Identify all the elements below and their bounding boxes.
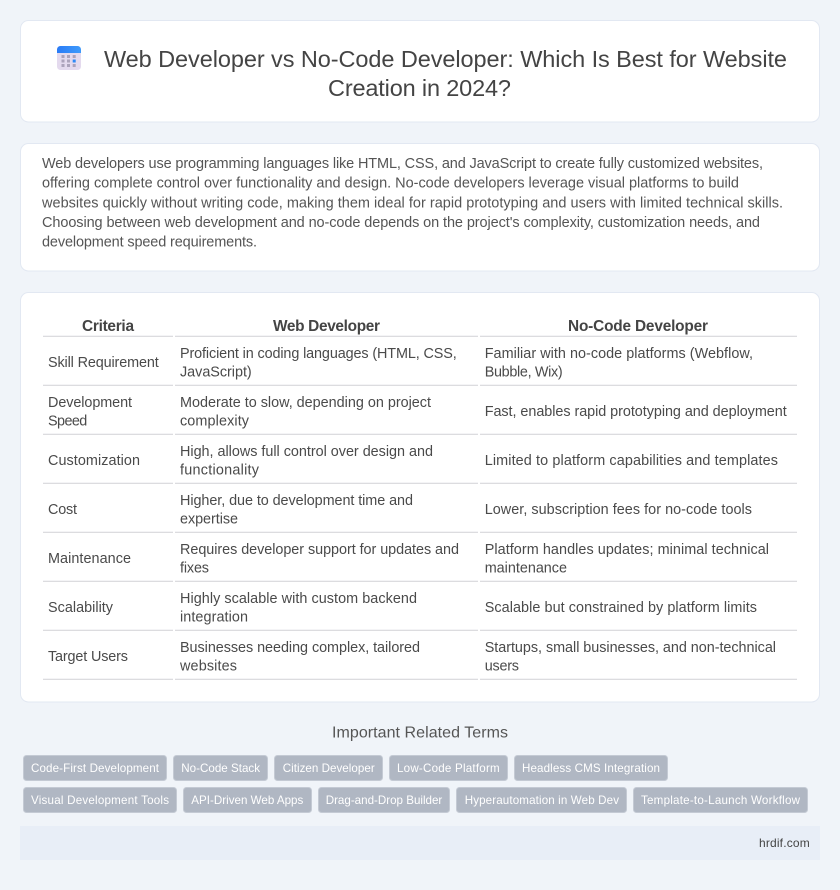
text block: description: development speed requirements. <box>42 234 257 250</box>
table row: cost: Lower, subscription fees for no-code tools <box>485 502 752 518</box>
table row: scalability: Scalability <box>48 600 114 616</box>
tag <box>174 756 268 780</box>
panel: description <box>20 144 820 271</box>
title <box>104 46 787 101</box>
text block: description <box>41 156 783 250</box>
tag: Template-to-Launch Workflow <box>641 794 801 807</box>
table row: scalability: Highly scalable with custom backend <box>180 591 417 607</box>
panel: comparison table <box>20 292 820 702</box>
tag: No-Code Stack <box>181 762 260 775</box>
table row: maintenance: fixes <box>180 561 209 577</box>
tag: API-Driven Web Apps <box>191 794 304 807</box>
tag <box>634 788 808 812</box>
tag: Citizen Developer <box>283 762 375 775</box>
table row: customization: Limited to platform capabilities and templates <box>485 453 778 469</box>
text block: description: Choosing between web development and no-code depends on the project's complexity, customization needs, and <box>42 215 760 231</box>
table row: scalability <box>43 591 797 631</box>
table row: development speed: Moderate to slow, depending on project <box>180 395 431 411</box>
text block: description: offering complete control over functionality and design. No-code developers leverage visual platforms to build <box>42 176 739 192</box>
tag: Drag-and-Drop Builder <box>326 794 442 807</box>
table row: customization: Customization <box>48 453 140 469</box>
table row: development speed: Development <box>48 395 132 411</box>
tag: Low-Code Platform <box>397 762 500 775</box>
tag <box>24 788 176 812</box>
tag <box>390 756 508 780</box>
table row: target users: Target Users <box>48 649 128 665</box>
table row: customization <box>43 444 797 484</box>
table row: target users: Startups, small businesses, and non-technical <box>485 640 776 656</box>
table row: development speed: Speed <box>48 414 87 430</box>
table header row <box>43 318 797 337</box>
table row: cost: expertise <box>180 512 238 528</box>
panel: header <box>20 20 820 122</box>
tag: Headless CMS Integration <box>522 762 660 775</box>
table row: scalability: integration <box>180 610 248 626</box>
tag: Hyperautomation in Web Dev <box>465 794 619 807</box>
table row: maintenance: maintenance <box>485 561 567 577</box>
table row: development speed <box>43 395 797 435</box>
table row: skill requirement: Bubble, Wix) <box>485 365 563 381</box>
title: Creation in 2024? <box>328 75 511 101</box>
tag <box>184 788 312 812</box>
table row: skill requirement: JavaScript) <box>180 365 252 381</box>
table row: target users: users <box>485 659 519 675</box>
table row: maintenance: Requires developer support for updates and <box>180 542 459 558</box>
tag: Visual Development Tools <box>31 794 169 807</box>
table header row: No-Code Developer <box>568 318 708 335</box>
table row: target users: websites <box>179 659 237 675</box>
tag <box>514 756 668 780</box>
text block: description: websites quickly without writing code, making them ideal for rapid prototyping and users with limited technical skills. <box>41 195 783 211</box>
footer source text: hrdif.com <box>759 836 810 850</box>
table row: customization: High, allows full control over design and <box>180 444 433 460</box>
table row: maintenance: Platform handles updates; minimal technical <box>485 542 769 558</box>
table row: cost: Higher, due to development time and <box>180 493 413 509</box>
table header row: Web Developer <box>273 318 380 335</box>
table row: cost: Cost <box>48 502 77 518</box>
table row: cost <box>43 493 797 533</box>
table row: maintenance <box>43 542 797 582</box>
footer bar <box>20 826 820 860</box>
heading: important related terms: Important Related Terms <box>332 724 508 742</box>
table row: development speed: Fast, enables rapid prototyping and deployment <box>485 404 787 420</box>
table row: maintenance: Maintenance <box>48 551 131 567</box>
table row: skill requirement: Skill Requirement <box>48 355 159 371</box>
table header row: Criteria <box>82 318 134 335</box>
table row: customization: functionality <box>180 463 260 479</box>
tag <box>318 788 450 812</box>
tag <box>274 756 382 780</box>
table row: target users <box>43 640 797 680</box>
icon: calendar grid <box>57 46 81 70</box>
tag <box>456 788 626 812</box>
table row: skill requirement: Familiar with no-code platforms (Webflow, <box>485 346 753 362</box>
table row: target users: Businesses needing complex, tailored <box>180 640 420 656</box>
tags: related terms <box>24 756 808 812</box>
table row: development speed: complexity <box>180 414 250 430</box>
table row: scalability: Scalable but constrained by platform limits <box>485 600 757 616</box>
tag: Code-First Development <box>31 762 160 775</box>
table row: skill requirement: Proficient in coding languages (HTML, CSS, <box>180 346 457 362</box>
tag <box>24 756 166 780</box>
table row: skill requirement <box>43 346 797 386</box>
title: Web Developer vs No-Code Developer: Which Is Best for Website <box>104 46 787 72</box>
text block: description: Web developers use programming languages like HTML, CSS, and JavaScript to create fully customized websites, <box>42 156 763 172</box>
